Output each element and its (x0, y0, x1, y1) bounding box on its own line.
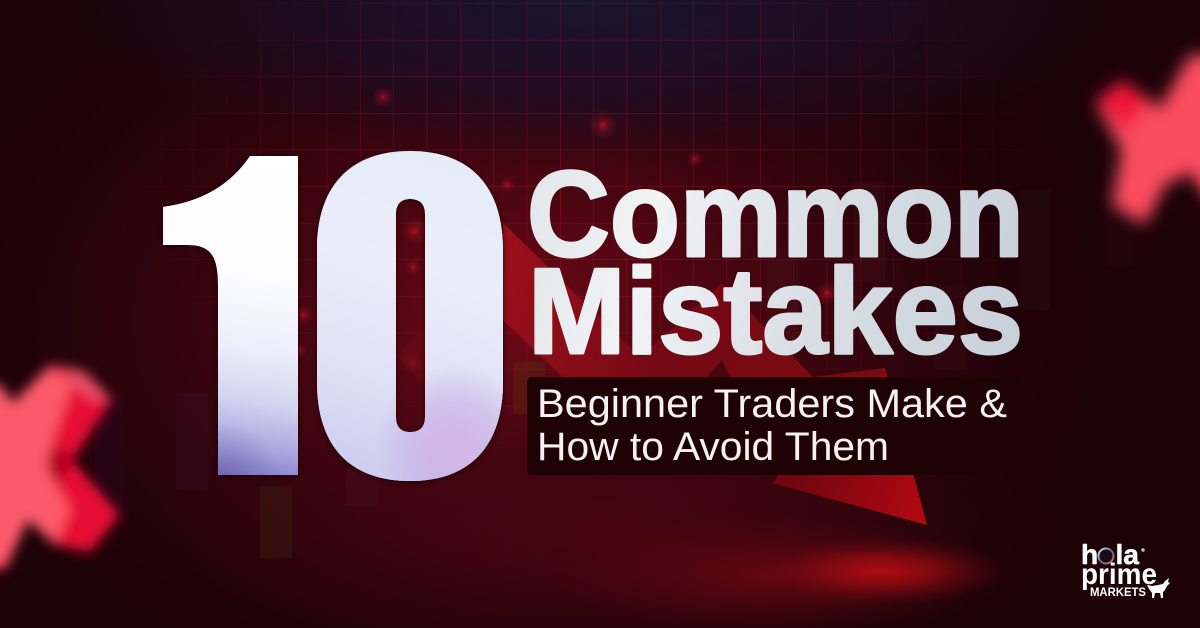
icon: left red X (0, 365, 120, 570)
digit 1: 1 (112, 63, 368, 576)
down arrow (397, 223, 927, 525)
logo: hola prime markets (1081, 539, 1170, 599)
icon: right red X (1095, 55, 1200, 225)
subtitle box (527, 377, 1022, 475)
subtitle text: Beginner Traders Make & (537, 382, 1007, 426)
icon: bull (1147, 578, 1170, 598)
title: Common Mistakes (527, 146, 1024, 379)
title line: Mistakes: Mistakes (528, 243, 1023, 379)
faint candlestick chart (95, 130, 1135, 558)
logo word: MARKETS: MARKETS (1090, 585, 1146, 599)
digit 1 (162, 154, 302, 477)
big number 10 (162, 150, 507, 485)
digit 0: 0 (282, 63, 538, 576)
title line: Common: Common (527, 146, 1024, 282)
logo bubble (1098, 548, 1114, 564)
subtitle text: How to Avoid Them (537, 425, 889, 469)
logo word: prime: prime (1081, 558, 1157, 591)
floor glow (500, 500, 1060, 628)
subtitle text (537, 382, 1007, 469)
digit 0 (313, 150, 507, 485)
logo registered mark (1141, 548, 1145, 552)
logo word: hola: hola (1081, 539, 1139, 570)
glowing grid nodes (292, 86, 839, 373)
